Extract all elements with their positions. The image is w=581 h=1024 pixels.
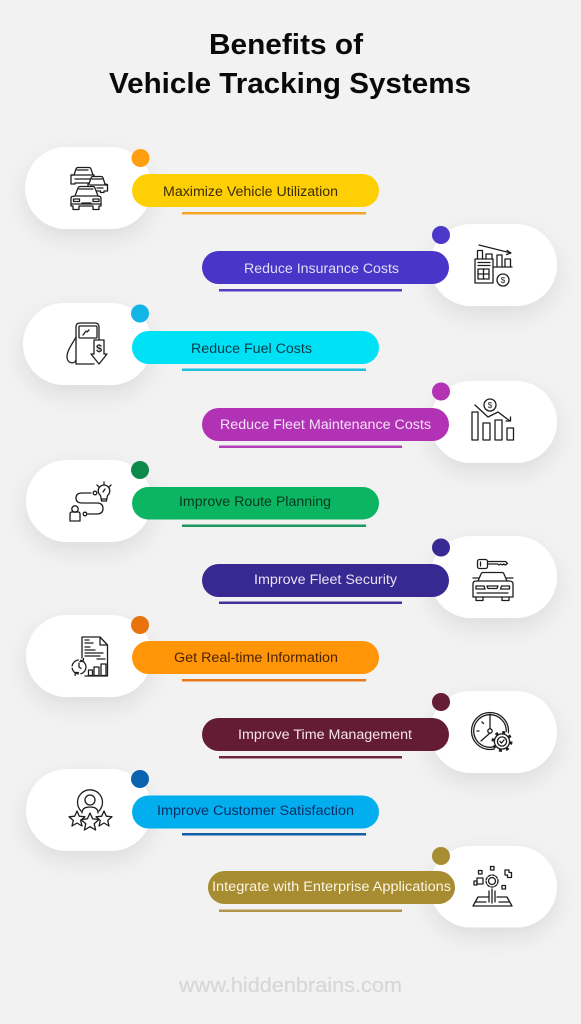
underline (219, 289, 402, 292)
white card (26, 615, 152, 697)
icon: car and key (473, 560, 513, 600)
underline (182, 212, 366, 214)
row 9: improve customer satisfaction (26, 769, 379, 851)
icon: clock and gear (472, 712, 512, 752)
pill (202, 718, 449, 751)
row 7: get real-time information (26, 615, 379, 697)
pill (202, 564, 449, 597)
label: Improve Customer Satisfaction (157, 803, 354, 819)
underline (219, 910, 402, 912)
label: Integrate with Enterprise Applications (212, 879, 451, 895)
dot (432, 226, 450, 244)
label: Improve Fleet Security (254, 572, 398, 588)
label: Reduce Fuel Costs (191, 341, 312, 357)
dot (131, 461, 149, 479)
icon: gear and app blocks (473, 866, 512, 906)
label: Reduce Insurance Costs (244, 261, 399, 277)
underline (219, 756, 402, 758)
dot (432, 382, 450, 400)
dot (432, 847, 450, 865)
underline (182, 524, 366, 527)
underline (219, 602, 402, 604)
white card (26, 769, 152, 851)
icon: cars (71, 168, 108, 210)
row 1: maximize vehicle utilization (25, 147, 379, 229)
pill (208, 871, 455, 904)
underline (182, 833, 366, 836)
row 10: integrate with enterprise applications (208, 846, 557, 928)
pill (202, 408, 449, 441)
white card (26, 460, 152, 542)
title: Vehicle Tracking Systems (109, 68, 471, 100)
white card (25, 147, 152, 229)
underline (182, 679, 366, 682)
title: Benefits of (209, 29, 363, 61)
icon: fuel pump: $ (96, 343, 102, 355)
white card (430, 536, 557, 618)
icon: falling costs chart: $ (488, 401, 493, 410)
pill (132, 796, 379, 828)
row 4: reduce fleet maintenance costs (202, 381, 557, 463)
pill (132, 487, 379, 520)
white card (430, 224, 557, 306)
white card (430, 846, 557, 928)
row 3: reduce fuel costs (23, 303, 379, 385)
row 6: improve fleet security (202, 536, 557, 618)
icon: calculator and falling chart: $ (501, 276, 506, 285)
underline (219, 446, 402, 448)
label: Improve Time Management (238, 727, 412, 743)
pill (132, 641, 379, 674)
icon: customer and stars (69, 790, 112, 830)
label: Improve Route Planning (179, 494, 331, 510)
pill (132, 174, 379, 207)
pill (132, 331, 379, 364)
white card (430, 691, 557, 773)
icon: document and chart (72, 637, 108, 676)
label: Reduce Fleet Maintenance Costs (220, 417, 431, 433)
icon: route with light bulb (70, 482, 111, 521)
label: Maximize Vehicle Utilization (163, 184, 338, 200)
icon: fuel pump (67, 323, 107, 364)
title (109, 29, 471, 100)
dot (432, 538, 450, 556)
white card (430, 381, 557, 463)
underline (182, 368, 366, 371)
dot (432, 693, 450, 711)
row 8: improve time management (202, 691, 557, 773)
dot (131, 616, 149, 634)
dot (131, 770, 149, 788)
dot (132, 149, 150, 167)
icon: calculator and falling chart (475, 245, 512, 286)
dot (131, 304, 149, 322)
pill (202, 251, 449, 284)
row 2: reduce insurance costs (202, 224, 557, 306)
footer website: www.hiddenbrains.com (178, 974, 402, 997)
row 5: improve route planning (26, 460, 379, 542)
white card (23, 303, 152, 385)
icon: falling costs chart (472, 399, 514, 440)
label: Get Real-time Information (174, 650, 338, 666)
